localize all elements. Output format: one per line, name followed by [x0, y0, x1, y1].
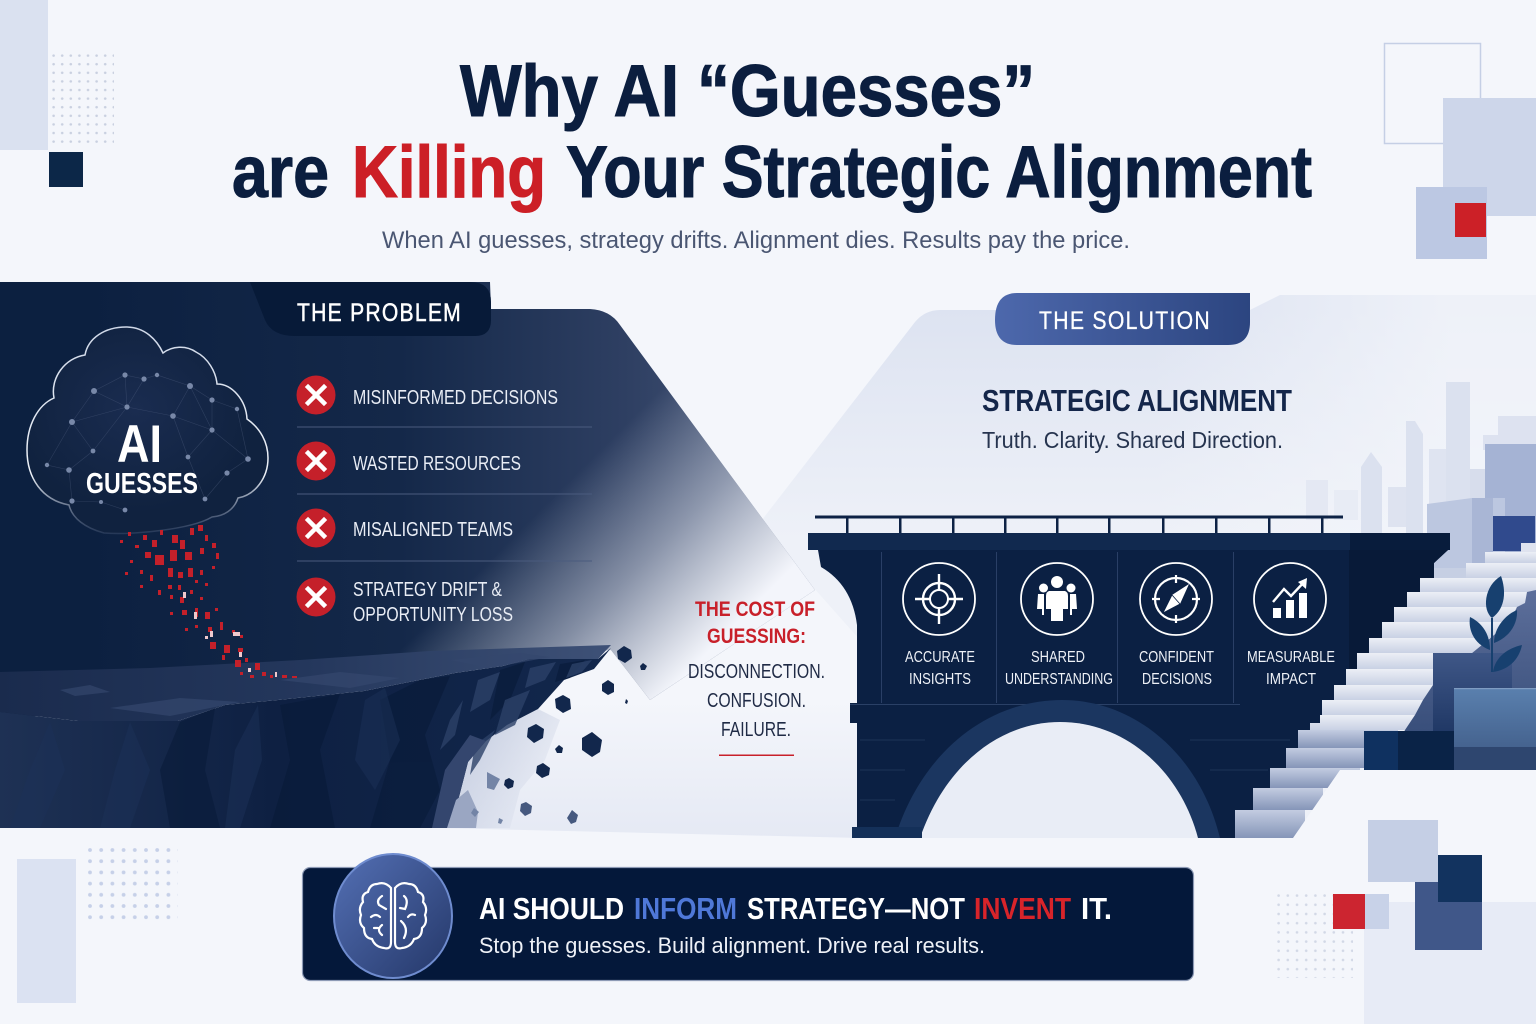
cloud network nodes: [45, 372, 251, 512]
title: Killing: [352, 132, 546, 213]
bridge: [808, 516, 1450, 838]
panel: the solution background: [758, 295, 1536, 838]
icon: confident decisions: [1140, 563, 1212, 635]
banner headline: INVENT: [974, 891, 1071, 926]
central light backdrop: [440, 700, 860, 838]
icon: measurable impact: [1254, 563, 1326, 635]
callout: the cost of guessing: CONFUSION.: [707, 690, 806, 712]
icon: brain: [334, 854, 452, 978]
icon: shared understanding: [1021, 563, 1093, 635]
cliff: [0, 645, 611, 828]
item: misaligned teams: MISALIGNED TEAMS: [353, 519, 513, 541]
banner headline: INFORM: [634, 891, 737, 926]
red particles falling: [120, 525, 297, 678]
cloud: AI guesses: GUESSES: [86, 468, 198, 500]
bridge body: [818, 550, 1448, 838]
label: confident decisions: [1139, 649, 1214, 688]
title: Your Strategic Alignment: [566, 132, 1312, 213]
bridge foot: [852, 827, 922, 838]
decoration: bottom left shapes: [17, 848, 178, 1003]
cliff top surface: [0, 645, 611, 721]
label: shared understanding: SHARED: [1031, 649, 1085, 666]
cloud: AI guesses: [27, 327, 268, 533]
banner headline: STRATEGY—NOT: [747, 891, 965, 926]
panel: the problem background: [0, 282, 815, 720]
bridge ledge: [850, 703, 1320, 723]
callout: the cost of guessing: DISCONNECTION.: [688, 661, 825, 683]
label: accurate insights: INSIGHTS: [909, 671, 971, 688]
decoration: top left shapes: [0, 0, 114, 187]
pale particles: [183, 592, 277, 677]
item: wasted resources: [296, 442, 521, 480]
banner headline: [479, 891, 1112, 926]
cloud network lines: [47, 375, 248, 510]
label: accurate insights: [905, 649, 975, 688]
cliff lower right lit rock: [432, 735, 486, 828]
cliff face: [0, 648, 611, 828]
city skyline: [1306, 382, 1536, 590]
item: strategy drift and opportunity loss: OPPORTUNITY LOSS: [353, 604, 513, 626]
item: strategy drift and opportunity loss: [296, 578, 513, 626]
label: measurable impact: [1247, 649, 1335, 688]
label: confident decisions: DECISIONS: [1142, 671, 1212, 688]
tab: the solution: THE SOLUTION: [1039, 307, 1211, 335]
label: shared understanding: UNDERSTANDING: [1005, 671, 1113, 688]
arch opening: [920, 722, 1198, 838]
arch band: [895, 700, 1220, 838]
item: misinformed decisions: MISINFORMED DECISIONS: [353, 387, 558, 409]
subtitle: When AI guesses, strategy drifts. Alignment dies. Results pay the price.: [382, 227, 1130, 254]
falling rocks: [471, 646, 647, 824]
decoration: bottom right shapes: [1277, 820, 1536, 1024]
decoration: top right shapes: [1384, 44, 1536, 259]
label: confident decisions: CONFIDENT: [1139, 649, 1214, 666]
callout: the cost of guessing: GUESSING:: [707, 625, 806, 648]
banner: [302, 854, 1194, 980]
staircase: [1235, 543, 1536, 838]
item: wasted resources: WASTED RESOURCES: [353, 453, 521, 475]
banner subtext: Stop the guesses. Build alignment. Drive real results.: [479, 933, 985, 958]
item: strategy drift and opportunity loss: STRATEGY DRIFT &: [353, 579, 503, 601]
tab: the problem: THE PROBLEM: [297, 299, 462, 327]
bridge railing: [815, 516, 1343, 534]
strategic alignment heading: STRATEGIC ALIGNMENT: [982, 383, 1292, 418]
item: misinformed decisions: [296, 376, 558, 414]
title: [232, 51, 1312, 213]
label: measurable impact: IMPACT: [1266, 671, 1316, 688]
item: misaligned teams: [296, 508, 513, 548]
banner headline: IT.: [1081, 891, 1112, 926]
callout: the cost of guessing: THE COST OF: [695, 598, 815, 621]
title: are: [232, 132, 329, 213]
bridge deck: [808, 533, 1350, 550]
callout: the cost of guessing: FAILURE.: [721, 719, 791, 741]
label: accurate insights: ACCURATE: [905, 649, 975, 666]
white lower right cut: [1200, 770, 1536, 1024]
right blocks and planter: [1364, 576, 1536, 770]
tab: the solution: [995, 293, 1250, 345]
title: Why AI “Guesses”: [460, 51, 1035, 132]
strategic alignment heading: Truth. Clarity. Shared Direction.: [982, 427, 1283, 453]
label: shared understanding: [1005, 649, 1113, 688]
cliff shadow on backdrop: [440, 709, 560, 828]
label: measurable impact: MEASURABLE: [1247, 649, 1335, 666]
cliff lit facets: [440, 660, 592, 775]
problem list: [296, 376, 592, 626]
strategic alignment heading: [982, 383, 1292, 453]
icon: accurate insights: [903, 563, 975, 635]
plant: [1470, 576, 1522, 672]
banner headline: AI SHOULD: [479, 891, 624, 926]
cloud: AI guesses: AI: [117, 415, 162, 474]
callout: the cost of guessing: [688, 598, 825, 756]
tab: the problem: [250, 282, 491, 336]
